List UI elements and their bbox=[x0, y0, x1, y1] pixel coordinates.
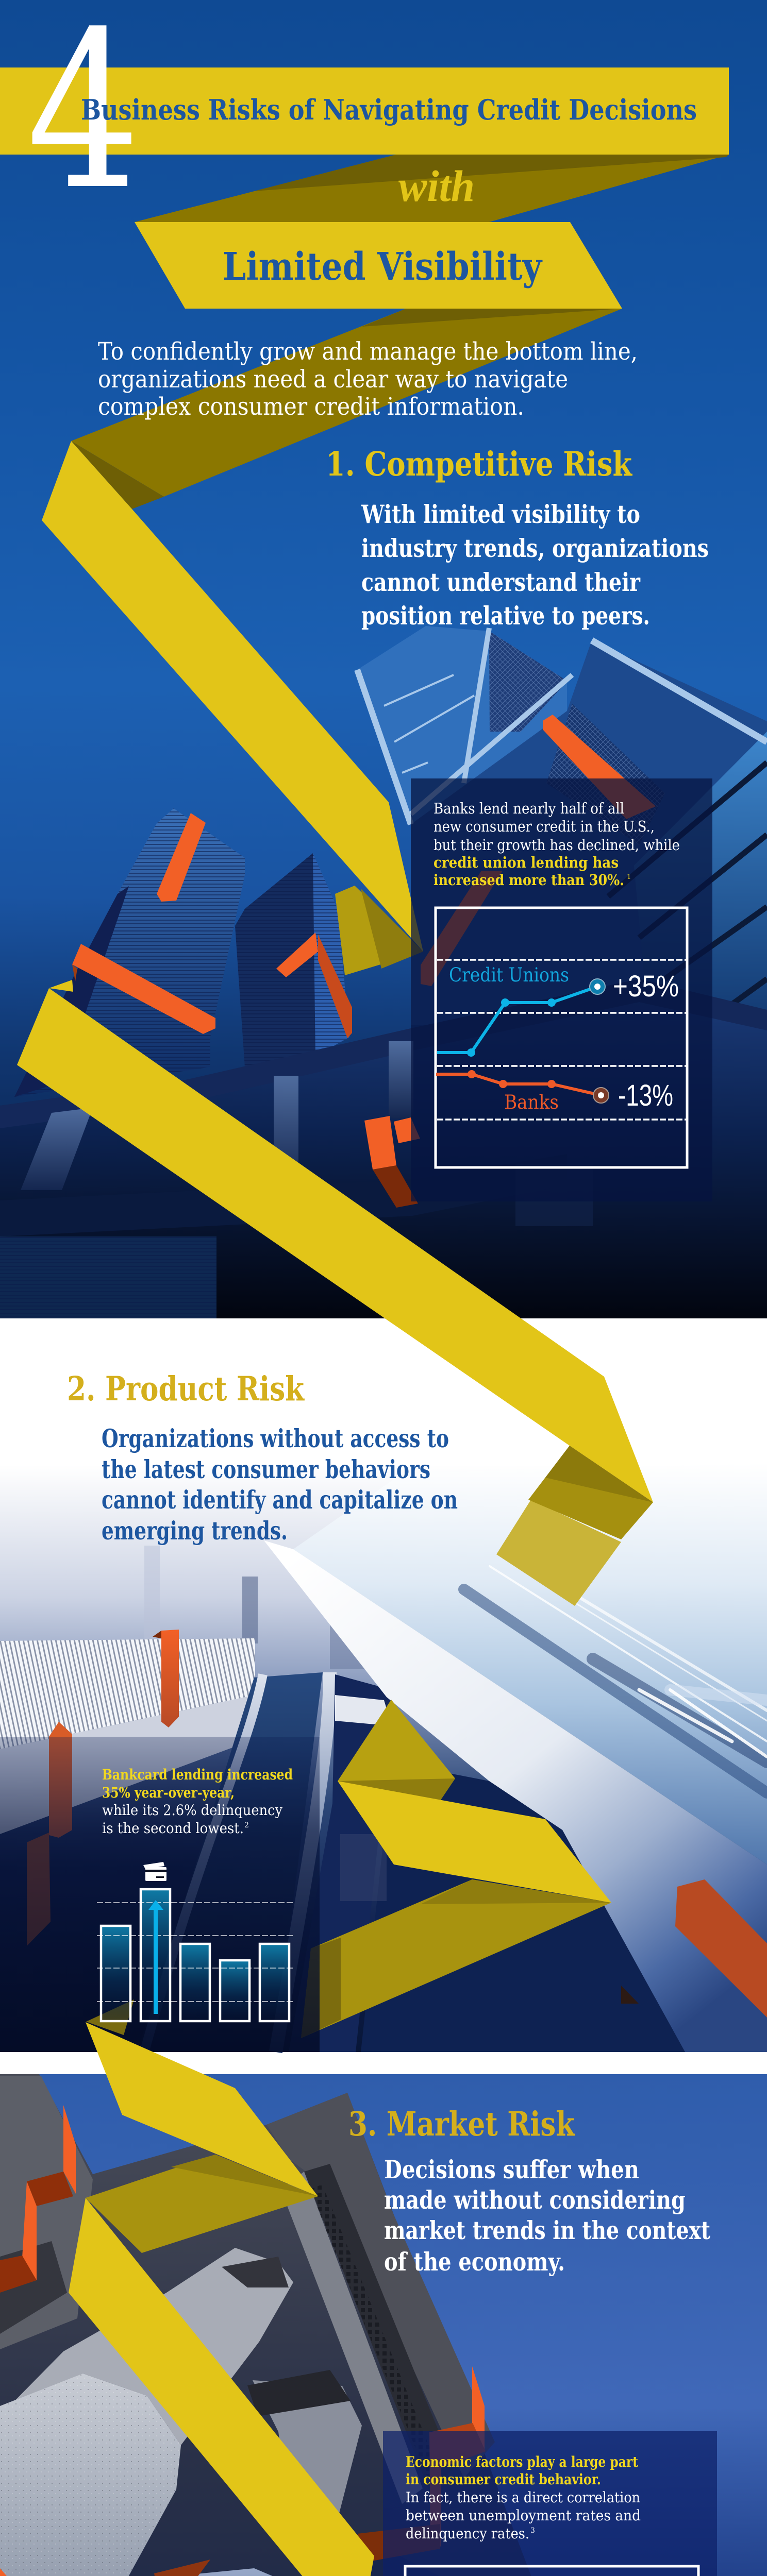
text: product risk body: emerging trends. bbox=[102, 1516, 288, 1546]
orange ribbon: section 1 bbox=[72, 715, 656, 1208]
text: product risk body: Organizations without access to bbox=[102, 1423, 449, 1453]
callout text: banks: new consumer credit in the U.S., bbox=[433, 818, 655, 835]
text: competitive risk body: With limited visibility to bbox=[361, 499, 640, 529]
heading: product risk: 2. Product Risk bbox=[67, 1369, 305, 1409]
line chart: credit unions vs banks: Credit Unions bbox=[449, 964, 569, 986]
intro text: complex consumer credit information. bbox=[98, 393, 524, 421]
intro text bbox=[98, 337, 638, 421]
photo: skyscrapers against blue sky bbox=[0, 0, 767, 1318]
orange ribbon: section 2 bbox=[27, 1630, 767, 2018]
text: competitive risk body: position relative to peers. bbox=[361, 601, 650, 631]
photo: classical columned building bbox=[0, 2074, 767, 2576]
intro text: organizations need a clear way to navigate bbox=[98, 365, 568, 394]
bar chart: bankcard lending bbox=[97, 1862, 293, 2021]
callout text: economic factors: between unemployment rates and bbox=[406, 2507, 641, 2524]
callout text: banks: increased more than 30%. bbox=[433, 871, 624, 889]
text: product risk body bbox=[102, 1423, 458, 1546]
callout text: economic factors: In fact, there is a direct correlation bbox=[406, 2489, 640, 2506]
line chart: credit unions vs banks bbox=[436, 908, 687, 1167]
title: with bbox=[398, 161, 475, 211]
text: market risk body: made without considering bbox=[384, 2185, 686, 2215]
yellow ribbon: header folds bbox=[71, 155, 729, 509]
callout text: economic factors: in consumer credit behavior. bbox=[406, 2471, 601, 2488]
callout text: economic factors: Economic factors play a large part bbox=[406, 2453, 638, 2470]
text: competitive risk body bbox=[361, 499, 709, 631]
callout text: bankcard bbox=[102, 1766, 293, 1837]
text: competitive risk body: cannot understand their bbox=[361, 567, 641, 597]
callout text: banks: but their growth has declined, while bbox=[433, 836, 680, 854]
yellow ribbon: sections 2 to 3 bbox=[69, 1999, 767, 2576]
panel overlay: economic factors callout bbox=[383, 2431, 717, 2576]
line chart: credit unions vs banks: Banks bbox=[504, 1091, 559, 1113]
text: market risk body: Decisions suffer when bbox=[384, 2155, 639, 2184]
callout text: bankcard: while its 2.6% delinquency bbox=[102, 1802, 282, 1819]
ribbon banner: Limited Visibility bbox=[135, 222, 622, 309]
callout text: banks: credit union lending has bbox=[433, 854, 619, 871]
heading: market risk: 3. Market Risk bbox=[348, 2105, 576, 2144]
callout text: bankcard: Bankcard lending increased bbox=[102, 1766, 293, 1783]
callout text: banks: Banks lend nearly half of all bbox=[433, 800, 624, 817]
intro text: To confidently grow and manage the bottom line, bbox=[98, 337, 638, 366]
panel overlay: bankcard callout bbox=[0, 1737, 320, 2052]
orange ribbon: section 3 bbox=[0, 2105, 521, 2576]
header band bbox=[0, 67, 729, 155]
callout text: economic factors: delinquency rates. bbox=[406, 2525, 529, 2542]
callout text: bankcard: 35% year-over-year, bbox=[102, 1784, 235, 1801]
callout text: banks: 1 bbox=[627, 873, 631, 881]
icon: credit cards bbox=[143, 1862, 166, 1881]
callout text: economic factors bbox=[406, 2453, 641, 2542]
text: product risk body: cannot identify and capitalize on bbox=[102, 1485, 458, 1515]
line chart: credit unions vs banks: +35% bbox=[613, 970, 679, 1003]
text: product risk body: the latest consumer behaviors bbox=[102, 1454, 430, 1484]
callout text: economic factors: 3 bbox=[530, 2527, 535, 2535]
heading: competitive risk: 1. Competitive Risk bbox=[326, 445, 633, 484]
icon: up arrow bbox=[148, 1900, 163, 2014]
title: Limited Visibility bbox=[223, 245, 543, 289]
title bbox=[81, 93, 697, 289]
panel overlay: credit unions callout bbox=[411, 778, 712, 1201]
line chart: credit unions vs banks: -13% bbox=[618, 1079, 673, 1112]
callout text: bankcard: is the second lowest. bbox=[102, 1820, 244, 1837]
text: market risk body bbox=[384, 2155, 710, 2277]
callout text: banks bbox=[433, 800, 680, 889]
yellow ribbon: section 1 bbox=[17, 441, 653, 1502]
yellow ribbon: section 2 folds bbox=[301, 1446, 653, 2038]
line chart: unemployment vs delinquency bbox=[405, 2566, 698, 2576]
photo: escalator hall bbox=[0, 1318, 767, 2052]
text: market risk body: of the economy. bbox=[384, 2247, 565, 2277]
callout text: bankcard: 2 bbox=[244, 1821, 249, 1829]
